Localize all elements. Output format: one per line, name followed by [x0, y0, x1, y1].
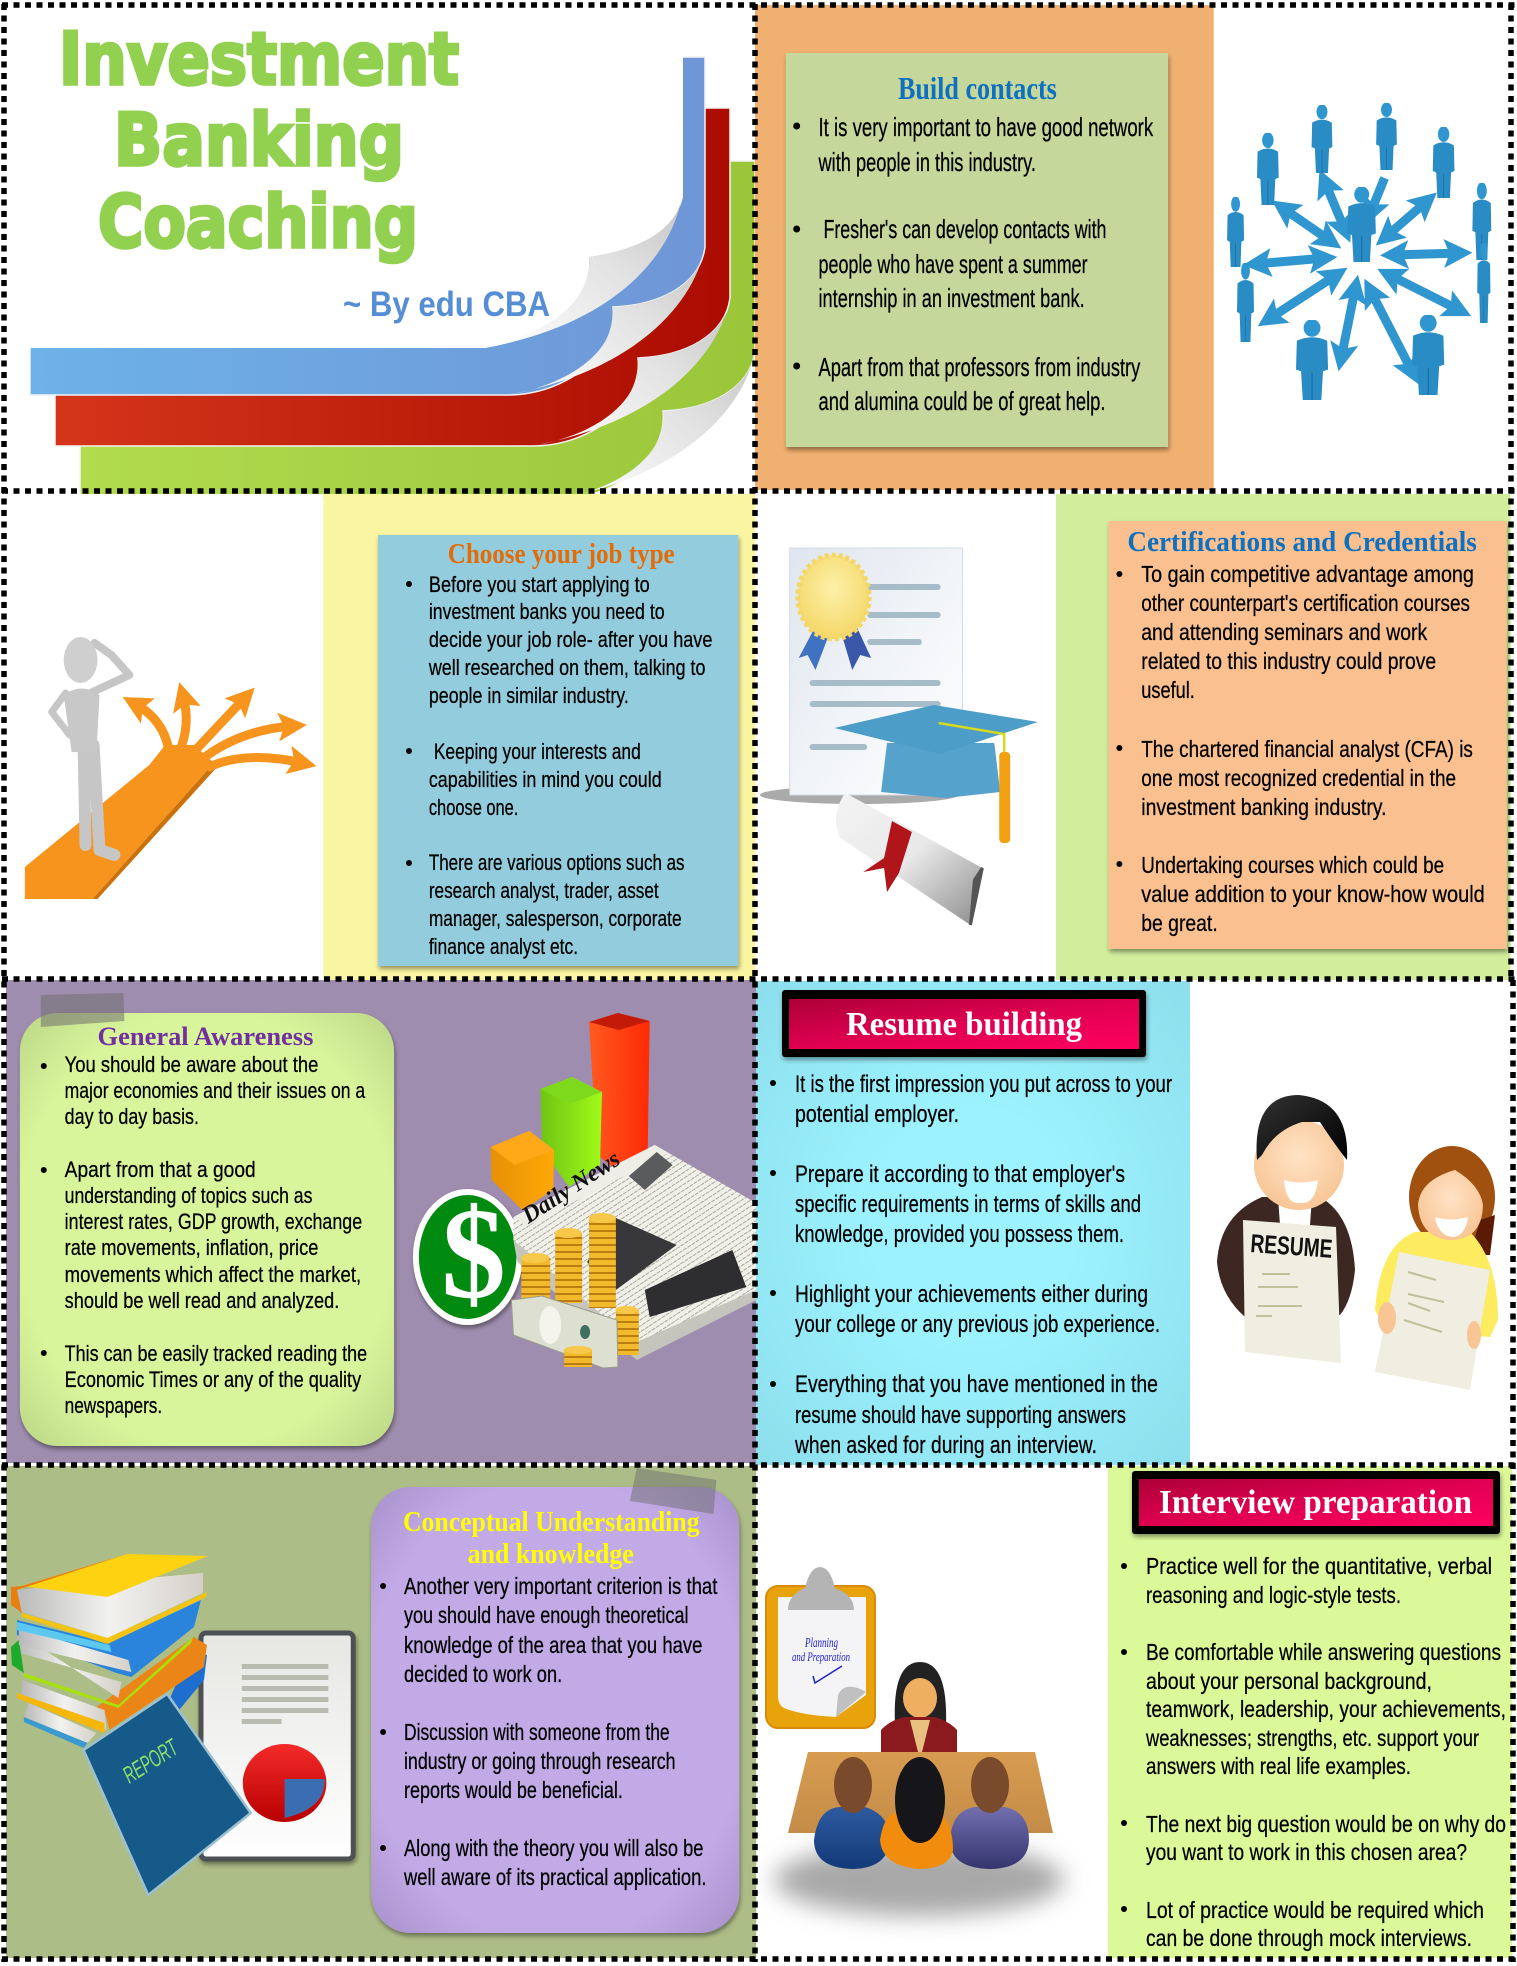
green background [1108, 1466, 1512, 1958]
olive background [6, 1466, 756, 1958]
bullet list: choose one. [429, 795, 518, 820]
bullet list: and alumina could be of great help. [819, 388, 1105, 416]
icon: document with pie chart [201, 1633, 353, 1859]
panel: general awareness [6, 980, 756, 1463]
bullet list: There are various options such as [429, 850, 685, 875]
icon: report book: REPORT [118, 1734, 184, 1789]
blue sheet [30, 57, 705, 395]
bullet list: Apart from that professors from industry [819, 354, 1140, 382]
lilac card [371, 1487, 739, 1933]
tape [630, 1468, 716, 1514]
bullet list: manager, salesperson, corporate [429, 906, 682, 931]
icon: man with resume: RESUME [1250, 1228, 1333, 1264]
title banner: Interview preparation [1159, 1484, 1472, 1521]
bullet list: It is the first impression you put across to your [795, 1071, 1172, 1098]
bullet list [41, 1052, 367, 1418]
bullet list: internship in an investment bank. [819, 285, 1085, 313]
bullet list: be great. [1141, 910, 1218, 936]
icon: stack of books [11, 1554, 208, 1748]
heading [403, 1507, 700, 1570]
icon: dollar badge: $ [441, 1182, 506, 1326]
title banner [1132, 1471, 1500, 1534]
icon: clipboard: Planning [804, 1636, 838, 1651]
bullet list [793, 114, 1153, 416]
blue card [378, 535, 738, 966]
bullet list: Undertaking courses which could be [1141, 852, 1444, 878]
bullet list [1116, 561, 1485, 936]
bullet list: one most recognized credential in the [1141, 765, 1456, 791]
title heading: Banking [114, 98, 404, 182]
red sheet [55, 108, 730, 446]
bullet list [380, 1573, 718, 1890]
heading: Choose your job type [448, 538, 675, 570]
bullet list: Everything that you have mentioned in the [795, 1371, 1158, 1398]
title heading [59, 17, 459, 264]
title banner: Resume building [846, 1006, 1082, 1043]
icon: newspaper [513, 1145, 756, 1360]
icon: interview table [774, 1662, 1064, 1916]
green sheet [80, 161, 755, 499]
bullet list: Prepare it according to that employer's [795, 1161, 1125, 1188]
bullet list: with people in this industry. [818, 149, 1036, 177]
icon: thinking figure at forked road [25, 637, 302, 899]
bullet list: and attending seminars and work [1141, 619, 1428, 645]
title heading: Coaching [98, 180, 418, 264]
bullet list: when asked for during an interview. [794, 1432, 1097, 1459]
bullet list: day to day basis. [65, 1104, 199, 1129]
heading: General Awareness [98, 1022, 313, 1051]
icon: certificate, cap and diploma [760, 548, 1038, 925]
bullet list: major economies and their issues on a [65, 1078, 366, 1103]
bullet list: should be well read and analyzed. [65, 1288, 339, 1313]
bullet list: capabilities in mind you could [429, 767, 662, 792]
icon: newspaper: Daily News [517, 1146, 625, 1230]
bullet list: movements which affect the market, [65, 1262, 361, 1287]
tape [41, 993, 124, 1027]
bullet list: potential employer. [795, 1101, 959, 1128]
icon: coins and bills [511, 1213, 639, 1368]
green background [1056, 494, 1511, 980]
bullet list: research analyst, trader, asset [429, 878, 659, 903]
heading: Build contacts [898, 71, 1057, 106]
title banner [782, 990, 1146, 1057]
bullet list: Fresher's can develop contacts with [823, 216, 1106, 244]
bullet list: finance analyst etc. [429, 934, 578, 959]
white left area [0, 494, 323, 980]
bullet list: understanding of topics such as [65, 1183, 312, 1208]
icon: people network [1227, 102, 1491, 400]
bullet list: Apart from that a good [65, 1157, 256, 1182]
bullet list: knowledge of the area that you have [404, 1632, 702, 1658]
bullet list: Highlight your achievements either during [795, 1281, 1148, 1308]
bullet list: newspapers. [65, 1393, 162, 1418]
bullet list: answers with real life examples. [1146, 1753, 1411, 1779]
bullet list: people in similar industry. [429, 683, 629, 708]
bullet list: resume should have supporting answers [795, 1402, 1126, 1429]
panel: interview preparation [766, 1466, 1512, 1958]
bullet list: To gain competitive advantage among [1141, 561, 1474, 587]
bullet list: well researched on them, talking to [428, 655, 705, 680]
bullet list: investment banking industry. [1141, 794, 1387, 820]
bullet list: well aware of its practical application. [403, 1864, 706, 1890]
bullet list [1121, 1553, 1506, 1951]
bullet list: about your personal background, [1146, 1668, 1432, 1694]
bullet list: Along with the theory you will also be [404, 1835, 703, 1861]
bullet list: Economic Times or any of the quality [65, 1367, 361, 1392]
icon: clipboard [766, 1567, 875, 1728]
bullet list: reasoning and logic-style tests. [1146, 1582, 1401, 1608]
bullet list: interest rates, GDP growth, exchange [65, 1209, 362, 1234]
panel: certifications and credentials [760, 494, 1511, 980]
panel: title [0, 5, 755, 499]
bullet list: useful. [1141, 677, 1195, 703]
icon: woman with resume [1375, 1146, 1498, 1390]
bullet list: related to this industry could prove [1141, 648, 1436, 674]
bullet list: Another very important criterion is that [404, 1573, 718, 1599]
white sheet [0, 5, 683, 348]
icon: man with resume [1217, 1095, 1355, 1363]
bullet list: This can be easily tracked reading the [65, 1341, 367, 1366]
bullet list: specific requirements in terms of skills and [795, 1191, 1141, 1218]
bullet list: people who have spent a summer [819, 251, 1088, 279]
yellow background [323, 494, 755, 980]
panel: resume building [756, 981, 1498, 1465]
bullet list: Keeping your interests and [434, 739, 641, 764]
heading: Conceptual Understanding [403, 1507, 700, 1538]
heading: and knowledge [468, 1539, 634, 1570]
bullet list [770, 1071, 1172, 1459]
aqua background [756, 981, 1190, 1465]
icon: clipboard: and Preparation [792, 1649, 850, 1664]
title heading: Investment [59, 17, 459, 101]
panel: conceptual understanding [6, 1466, 756, 1958]
icon: dollar badge [413, 1182, 522, 1326]
icon: bar chart [491, 1013, 650, 1210]
bullet list: reports would be beneficial. [404, 1777, 623, 1803]
heading: Certifications and Credentials [1127, 526, 1477, 558]
green card [786, 53, 1168, 447]
panel: choose your job type [0, 494, 755, 980]
panel: build contacts [755, 5, 1491, 490]
bullet list: You should be aware about the [65, 1052, 318, 1077]
byline: ~ By edu CBA [343, 285, 550, 324]
light green card [20, 1013, 394, 1446]
icon: report book [84, 1694, 251, 1895]
peach card [1108, 521, 1507, 949]
bullet list: rate movements, inflation, price [65, 1235, 318, 1260]
bullet list: decide your job role- after you have [429, 627, 712, 652]
orange background [755, 5, 1214, 490]
bullet list: It is very important to have good network [819, 114, 1153, 142]
bullet list: investment banks you need to [429, 599, 665, 624]
bullet list: your college or any previous job experience. [795, 1311, 1160, 1338]
bullet list: Discussion with someone from the [404, 1719, 670, 1745]
bullet list: Before you start applying to [429, 572, 650, 597]
bullet list: you should have enough theoretical [404, 1602, 689, 1628]
bullet list: knowledge, provided you possess them. [795, 1221, 1124, 1248]
bullet list [406, 572, 712, 959]
bullet list: decided to work on. [404, 1661, 562, 1687]
purple background [6, 980, 756, 1463]
bullet list: industry or going through research [404, 1748, 676, 1774]
